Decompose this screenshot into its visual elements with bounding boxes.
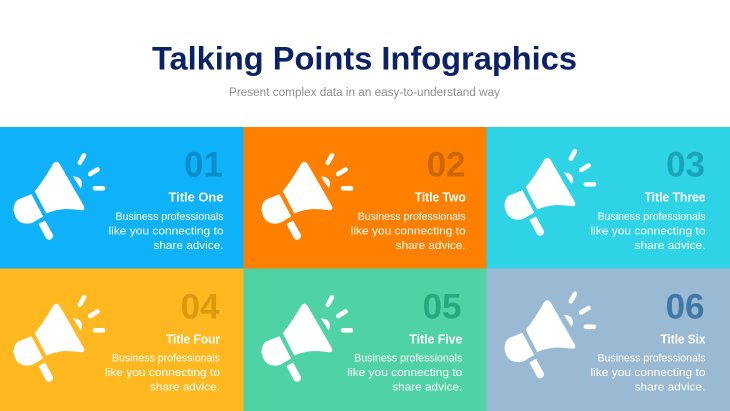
text block 01: share advice. (154, 240, 224, 252)
icon: megaphone 01 (14, 155, 103, 240)
text block 05: like you connecting to (347, 367, 462, 379)
text block 05: share advice. (392, 382, 462, 394)
heading: Title Three: Title Three (644, 190, 706, 204)
number 01: 01 (184, 146, 223, 185)
heading: Title One: Title One (168, 190, 224, 204)
text block 04 (105, 353, 220, 394)
text block 05 (347, 353, 463, 394)
text block 02: like you connecting to (351, 226, 466, 238)
panel: card 05 (244, 268, 486, 411)
icon: megaphone 06 (504, 294, 594, 378)
subtitle: Present complex data in an easy-to-understand way (229, 87, 500, 99)
text block 04: share advice. (150, 382, 220, 394)
icon: megaphone 03 (504, 151, 594, 236)
panel: card 06 (486, 268, 730, 411)
text block 03 (590, 211, 706, 252)
panel: card 01 (0, 127, 244, 268)
panel: card 02 (244, 127, 486, 268)
panel: card 04 (0, 268, 244, 411)
icon: megaphone 05 (262, 297, 351, 382)
heading: Title Five: Title Five (409, 333, 462, 347)
text block 01: Business professionals (116, 211, 224, 223)
icon: megaphone 04 (14, 297, 103, 382)
text block 02 (351, 211, 466, 252)
text block 04: Business professionals (112, 353, 220, 365)
number 04: 04 (181, 288, 220, 326)
number 03: 03 (666, 146, 705, 185)
icon: megaphone 02 (262, 155, 351, 240)
heading: Title Two: Title Two (415, 190, 466, 204)
text block 03: Business professionals (598, 211, 706, 223)
heading: Title Four: Title Four (166, 333, 220, 347)
text block 06: like you connecting to (590, 367, 706, 379)
text block 01 (108, 211, 224, 252)
text block 02: Business professionals (358, 211, 466, 223)
text block 05: Business professionals (354, 353, 463, 365)
number 02: 02 (427, 146, 466, 185)
text block 02: share advice. (396, 240, 466, 252)
number 06: 06 (666, 288, 704, 326)
text block 03: share advice. (634, 240, 706, 252)
text block 06 (590, 353, 706, 394)
panel: card 03 (486, 127, 730, 268)
text block 04: like you connecting to (105, 367, 220, 379)
heading: Title Six: Title Six (660, 333, 706, 347)
number 05: 05 (423, 288, 462, 326)
text block 06: share advice. (634, 382, 706, 394)
title: Talking Points Infographics (152, 40, 577, 76)
text block 06: Business professionals (598, 353, 706, 365)
text block 01: like you connecting to (108, 226, 224, 238)
text block 03: like you connecting to (590, 226, 706, 238)
